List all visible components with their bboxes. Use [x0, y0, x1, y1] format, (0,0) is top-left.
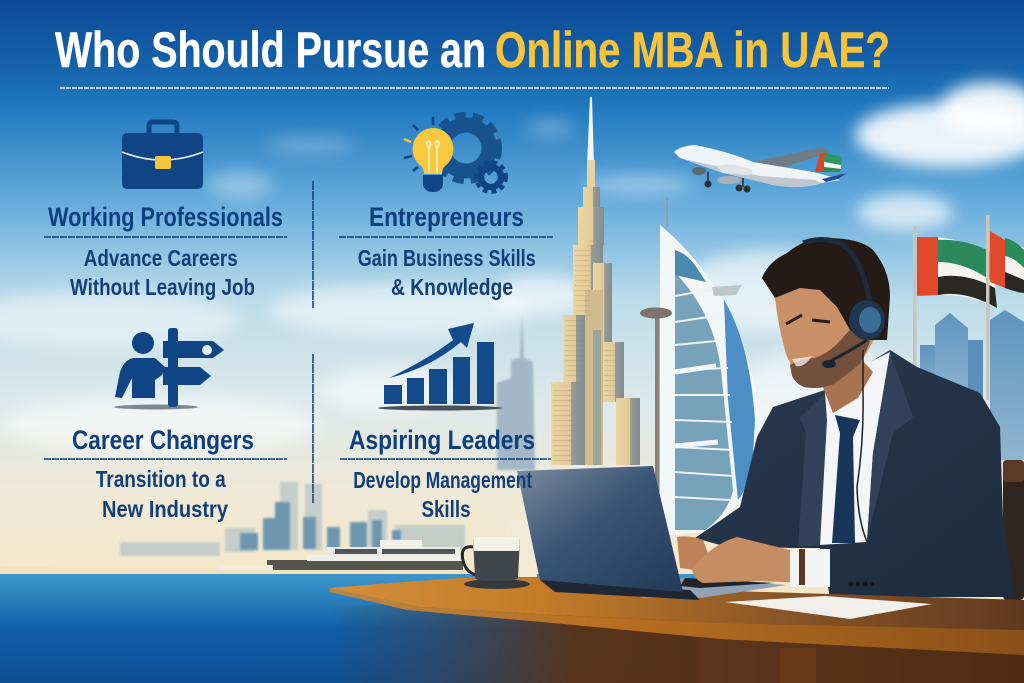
- right skyline: [920, 310, 1024, 460]
- title: Who Should Pursue an: [55, 22, 486, 78]
- man with headset: [695, 238, 1015, 597]
- heading: aspiring leaders: Aspiring Leaders: [349, 425, 535, 455]
- heading: entrepreneurs: Entrepreneurs: [369, 202, 524, 232]
- divider: [312, 354, 314, 504]
- heading: working professionals: Working Professionals: [48, 202, 283, 232]
- paper on desk: [725, 596, 932, 619]
- Burj Al Arab: [640, 198, 761, 535]
- laptop base: [540, 578, 787, 600]
- text: career changers: New Industry: [102, 496, 228, 522]
- distant skyline: [120, 482, 465, 556]
- paper behind cup: [507, 520, 537, 577]
- text: aspiring leaders: Skills: [422, 496, 470, 522]
- icon: person and signpost: [114, 328, 224, 410]
- panel: working professionals: [44, 122, 287, 300]
- title rule: [60, 87, 889, 89]
- Burj Khalifa: [551, 97, 640, 465]
- cruise ship: [220, 540, 463, 573]
- distant tower behind Burj: [497, 315, 535, 470]
- jacket buttons: [848, 582, 874, 586]
- face: [775, 280, 886, 388]
- shirt: [820, 352, 890, 545]
- coffee cup: [462, 537, 530, 589]
- text: working professionals: Without Leaving Job: [70, 274, 255, 300]
- text: working professionals: Advance Careers: [84, 245, 238, 271]
- beard: [790, 320, 870, 388]
- text: entrepreneurs: & Knowledge: [391, 274, 513, 300]
- title: [55, 22, 890, 78]
- icon: rising bar chart: [378, 323, 502, 410]
- airplane: [674, 145, 847, 192]
- divider: [312, 181, 314, 308]
- chair: [1003, 460, 1024, 600]
- UAE flags: [913, 215, 1024, 400]
- underside of desk: [330, 605, 1024, 683]
- heading: career changers: Career Changers: [72, 425, 254, 455]
- panel: aspiring leaders: [340, 323, 551, 522]
- sea: [0, 574, 700, 683]
- laptop lid: [517, 466, 683, 592]
- hands on keyboard: [677, 536, 830, 587]
- icon: briefcase: [122, 122, 203, 189]
- text: aspiring leaders: Develop Management: [353, 467, 532, 493]
- desk: [330, 578, 1024, 683]
- tie: [832, 415, 860, 543]
- observation pylon: [640, 308, 672, 533]
- icon: lightbulb and gears: [404, 115, 506, 192]
- left lapel: [798, 393, 827, 547]
- hair: [762, 238, 890, 340]
- panel: career changers: [44, 328, 287, 522]
- text: career changers: Transition to a: [96, 466, 226, 492]
- panel: entrepreneurs: [339, 115, 553, 300]
- title: Online MBA in UAE?: [495, 22, 890, 78]
- text: entrepreneurs: Gain Business Skills: [358, 245, 536, 271]
- right lapel: [867, 352, 913, 540]
- suit: [695, 350, 1015, 597]
- headset: [803, 240, 869, 300]
- neck: [822, 360, 873, 413]
- clouds: [0, 82, 1024, 490]
- beach: [0, 567, 470, 584]
